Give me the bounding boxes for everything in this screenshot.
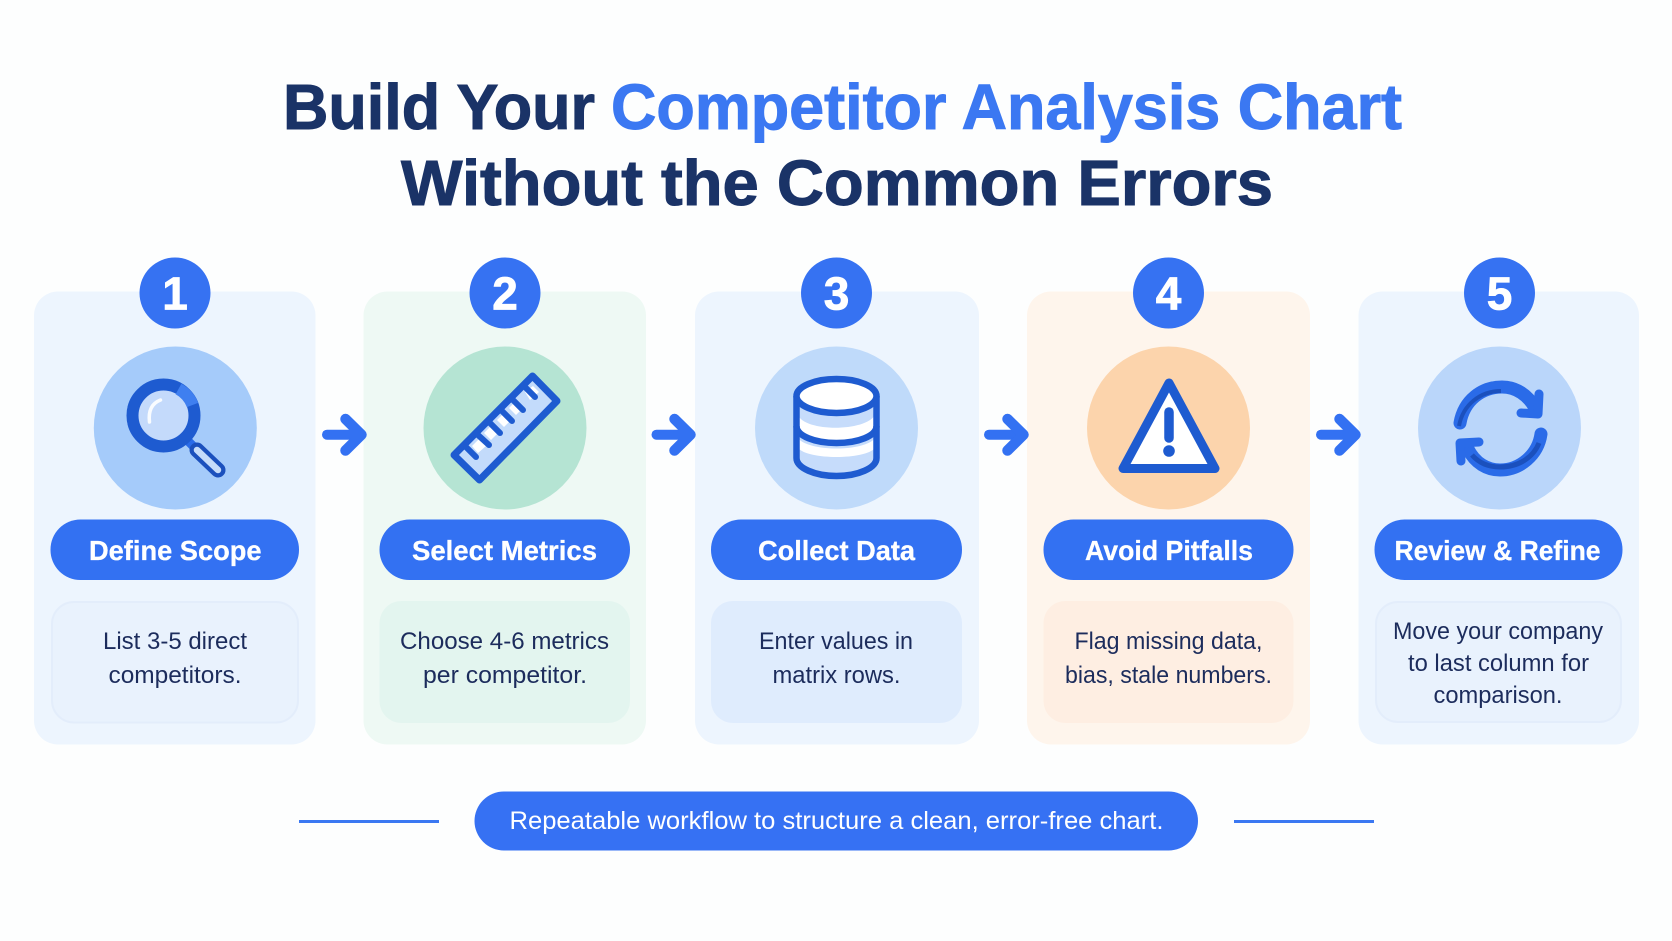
- footer callout: Repeatable workflow to structure a clean, error-free chart.: [510, 807, 1164, 835]
- step 2 description: per competitor.: [423, 662, 587, 689]
- step 3 label pill: Collect Data: [758, 535, 915, 566]
- step 5 description: [1376, 602, 1621, 722]
- panel: step 1 define scope: [34, 258, 316, 744]
- icon: warning triangle: [1087, 346, 1250, 510]
- step 5 label pill: Review & Refine: [1394, 535, 1600, 566]
- step 1 label pill: Define Scope: [89, 535, 262, 566]
- number badge 5: [1464, 258, 1535, 328]
- title: [283, 71, 1402, 219]
- title: Competitor Analysis Chart: [611, 71, 1402, 143]
- arrow 4 to 5: [1321, 419, 1356, 450]
- arrow 3 to 4: [989, 419, 1024, 450]
- step 5 description: comparison.: [1434, 682, 1562, 709]
- icon: database: [755, 346, 918, 510]
- step 4 description: bias, stale numbers.: [1065, 662, 1272, 689]
- number badge 4: [1133, 258, 1204, 328]
- step 5 description: to last column for: [1408, 650, 1589, 677]
- number badge 5: 5: [1487, 268, 1512, 320]
- step 1 description: [52, 602, 298, 722]
- icon: ruler: [424, 346, 586, 510]
- step 4 description: [1044, 601, 1294, 723]
- step 1 label pill: [50, 520, 299, 580]
- number badge 4: 4: [1156, 268, 1182, 320]
- step 2 description: Choose 4-6 metrics: [400, 628, 609, 655]
- step 2 label pill: [380, 520, 630, 580]
- footer callout: [474, 792, 1198, 850]
- step 2 label pill: Select Metrics: [412, 535, 597, 566]
- panel: step 5 review and refine: [1358, 258, 1639, 744]
- step 1 description: competitors.: [108, 662, 242, 689]
- footer line left: [299, 820, 439, 823]
- number badge 2: 2: [492, 268, 518, 320]
- footer line right: [1234, 820, 1374, 823]
- number badge 3: [801, 258, 872, 328]
- step 5 description: Move your company: [1393, 618, 1603, 645]
- title: Without the Common Errors: [401, 147, 1273, 219]
- number badge 3: 3: [824, 268, 849, 320]
- number badge 1: 1: [162, 268, 188, 320]
- step 3 description: [711, 601, 962, 723]
- step 3 label pill: [711, 520, 962, 580]
- step 3 description: matrix rows.: [772, 662, 900, 689]
- step 3 description: Enter values in: [759, 628, 913, 655]
- step 5 label pill: [1374, 520, 1622, 580]
- panel: step 3 collect data: [695, 258, 979, 744]
- panel: step 4 avoid pitfalls: [1027, 258, 1310, 744]
- arrow 1 to 2: [327, 419, 362, 450]
- step 2 description: [380, 601, 630, 723]
- icon: refresh arrows: [1418, 346, 1581, 510]
- step 4 label pill: Avoid Pitfalls: [1085, 535, 1253, 566]
- title: Build Your: [283, 71, 595, 143]
- icon: magnifying glass: [94, 346, 257, 510]
- number badge 2: [470, 258, 540, 328]
- step 4 label pill: [1044, 520, 1294, 580]
- arrow 2 to 3: [656, 419, 690, 450]
- panel: step 2 select metrics: [364, 258, 646, 744]
- step 4 description: Flag missing data,: [1074, 628, 1262, 655]
- step 1 description: List 3-5 direct: [103, 628, 247, 655]
- number badge 1: [140, 258, 210, 328]
